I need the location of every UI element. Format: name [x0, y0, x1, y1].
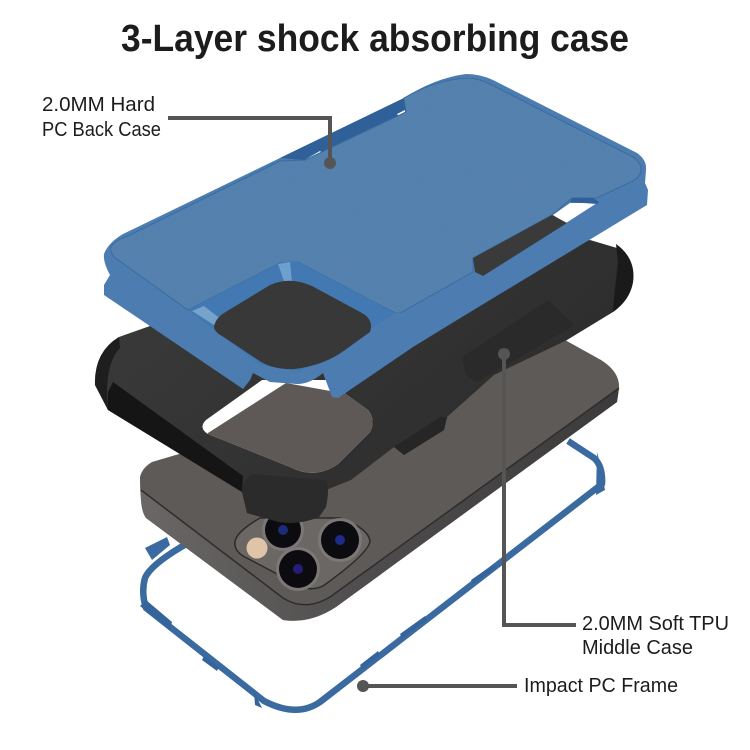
- callout: back case: 2.0MM Hard: [42, 94, 155, 116]
- callout: frame: Impact PC Frame: [524, 675, 678, 697]
- corner bumper: [242, 474, 328, 523]
- top slot: [280, 98, 406, 160]
- lens recess: [188, 261, 395, 372]
- title: 3-Layer shock absorbing case: [121, 18, 629, 60]
- callout: middle case: Middle Case: [582, 637, 693, 659]
- right bumper: [613, 244, 633, 312]
- button: [394, 417, 447, 455]
- callout: middle case: [498, 348, 729, 659]
- callout: frame: [357, 675, 678, 697]
- icon: camera island: [235, 509, 370, 591]
- callout: back case: [42, 94, 336, 169]
- clip: [462, 300, 575, 382]
- lens hole: [214, 281, 371, 369]
- band: [104, 74, 648, 398]
- callout: back case: PC Back Case: [42, 119, 161, 141]
- camera window: [202, 380, 373, 473]
- callout: middle case: 2.0MM Soft TPU: [582, 613, 729, 635]
- middle TPU case: [95, 240, 633, 523]
- phone: [140, 340, 619, 621]
- left rail: [108, 382, 243, 492]
- face: [111, 78, 641, 313]
- side cutout: [553, 203, 597, 223]
- back PC case: [104, 74, 648, 398]
- impact PC frame: [140, 441, 605, 710]
